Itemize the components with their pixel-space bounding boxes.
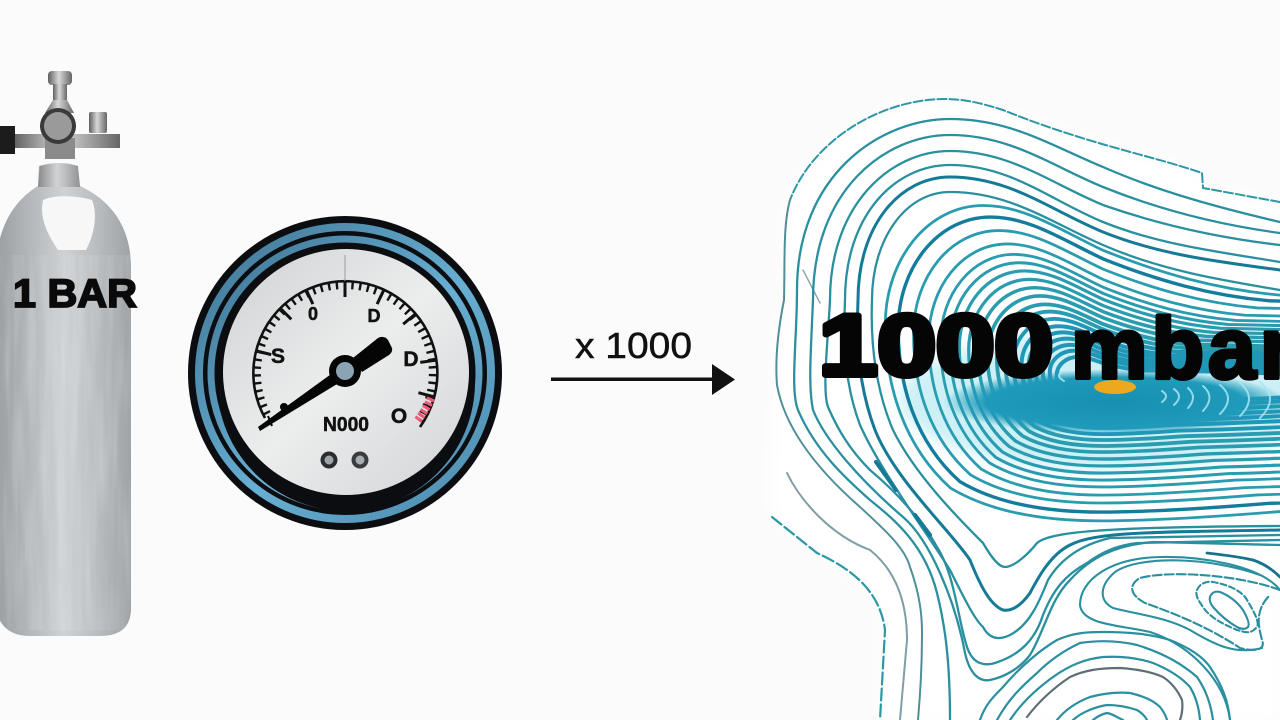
contour map — [772, 99, 1280, 720]
conversion arrow with x 1000 — [551, 325, 735, 395]
right island contours — [1080, 553, 1280, 720]
valve assembly — [0, 71, 120, 159]
gauge dial labels: N000 — [323, 414, 369, 436]
label: 1 BAR: 1 BAR — [13, 272, 137, 316]
value 1000: 1000 — [819, 298, 1053, 394]
label: 1000 mbar — [819, 298, 1280, 397]
gauge dial labels — [271, 304, 419, 436]
gas cylinder — [0, 71, 137, 636]
gauge red zone — [417, 398, 431, 421]
light ripples in pool — [1059, 372, 1270, 418]
gauge dial labels: S — [271, 345, 285, 368]
contour backdrop — [772, 99, 1280, 720]
nested central contour rings — [885, 206, 1280, 521]
cylinder neck — [38, 163, 80, 187]
gauge dial labels: D — [368, 306, 380, 326]
gauge scale — [253, 255, 437, 427]
gauge dial labels: O — [391, 405, 407, 428]
gauge small screws — [320, 452, 368, 468]
cylinder shoulder highlight — [42, 196, 95, 250]
gauge dial labels: D — [403, 348, 419, 371]
pressure gauge — [188, 216, 502, 530]
gauge dial labels: 0 — [308, 304, 318, 324]
orange marker — [1094, 380, 1136, 394]
cylinder brushed texture — [0, 255, 131, 630]
outer dashed contour lines — [772, 99, 1280, 720]
gauge needle — [258, 337, 392, 431]
cyan glow behind inner rings — [900, 330, 1280, 470]
top-wrapping contour lines — [794, 119, 1280, 720]
central blue pool — [943, 369, 1280, 435]
gauge bezel rings — [188, 216, 502, 530]
multiplier label: x 1000 — [575, 325, 692, 366]
bottom island contours — [980, 632, 1230, 720]
arrow shaft and head — [551, 364, 735, 395]
cylinder body — [0, 163, 131, 636]
gauge face — [223, 249, 469, 495]
